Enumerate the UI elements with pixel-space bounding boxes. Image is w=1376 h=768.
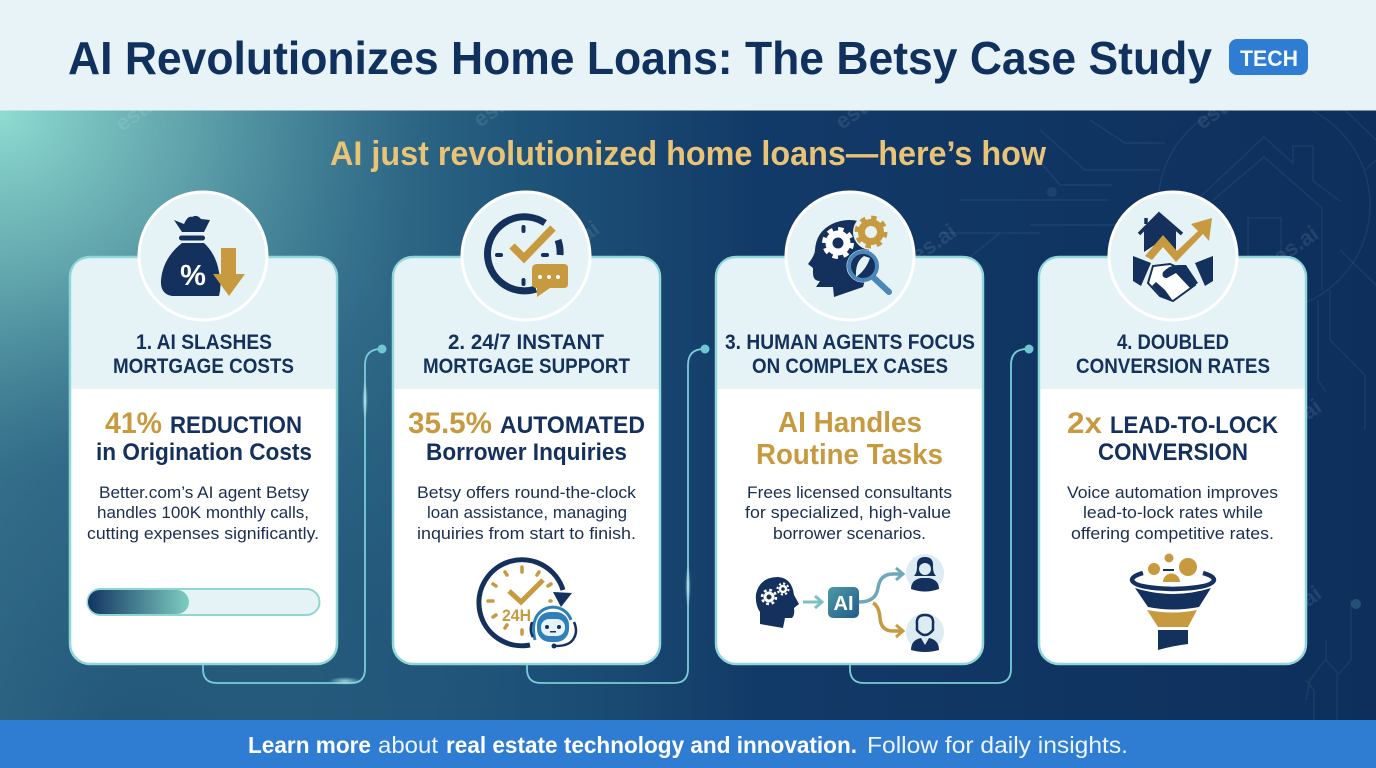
icon circle: head with gears and magnifier: [786, 192, 914, 320]
background: estates.ai: [864, 219, 961, 297]
heading: MORTGAGE SUPPORT: [423, 355, 630, 378]
body text: for specialized, high-value: [745, 503, 951, 522]
subtitle: AI just revolutionized home loans—here’s how: [330, 135, 1047, 173]
title: AI Revolutionizes Home Loans: The Betsy Case Study: [68, 32, 1212, 84]
icon: 24h clock with robot: 24H: [502, 606, 531, 625]
body text: offering competitive rates.: [1071, 524, 1274, 543]
stat: 35.5%: [408, 407, 492, 440]
stat: AI Handles: [778, 407, 922, 439]
footer text: Follow for daily insights.: [867, 732, 1128, 758]
icon circle: house, growth arrow and handshake: [1109, 192, 1237, 320]
body text: [87, 483, 319, 543]
icon circle: clock with check: [462, 192, 590, 320]
background: estates.ai: [1191, 56, 1287, 134]
footer text: about: [378, 732, 438, 758]
stat: CONVERSION: [1098, 439, 1248, 466]
heading: 4. DOUBLED: [1117, 331, 1229, 354]
stat: Borrower Inquiries: [426, 439, 627, 466]
body text: lead-to-lock rates while: [1083, 503, 1263, 522]
body text: handles 100K monthly calls,: [97, 503, 309, 522]
body text: loan assistance, managing: [427, 503, 627, 522]
panel: card 4: [1039, 192, 1306, 664]
body text: [417, 483, 637, 543]
heading: [113, 331, 294, 378]
connector: card 2 to card 3: [527, 344, 710, 683]
stat: 41%: [105, 407, 162, 440]
panel: card 3: [716, 192, 983, 664]
heading: 2. 24/7 INSTANT: [448, 331, 604, 354]
background: estates.ai: [469, 54, 565, 132]
background: estates.ai: [111, 58, 207, 136]
stat: REDUCTION: [170, 412, 302, 439]
diagram: human to AI to agents: [756, 554, 944, 652]
footer text: [248, 732, 1128, 758]
panel: card 1: [70, 192, 337, 664]
heading: CONVERSION RATES: [1076, 355, 1270, 378]
stat: [1067, 407, 1279, 466]
panel: card 2: [393, 192, 660, 664]
heading: ON COMPLEX CASES: [752, 355, 948, 378]
body text: Frees licensed consultants: [747, 483, 952, 502]
heading: MORTGAGE COSTS: [113, 355, 294, 378]
badge: TECH: TECH: [1240, 46, 1298, 71]
background: estates.ai: [1229, 581, 1326, 659]
stat: [408, 407, 645, 466]
diagram: human to AI to agents: AI: [834, 593, 854, 615]
footer text: real estate technology and innovation.: [446, 732, 857, 758]
icon: 24h clock with robot: [479, 560, 576, 648]
body text: Better.com’s AI agent Betsy: [99, 483, 310, 502]
header band: [0, 0, 1376, 110]
icon circle: money bag: %: [180, 260, 206, 292]
background: estates.ai: [507, 216, 604, 294]
body text: [1067, 483, 1278, 543]
heading: [423, 331, 630, 378]
stat: Routine Tasks: [756, 439, 943, 471]
body text: Betsy offers round-the-clock: [417, 483, 637, 502]
connector: card 1 to card 2: [203, 344, 386, 685]
background: estates.ai: [1229, 394, 1326, 472]
background: estates.ai: [831, 56, 927, 134]
progress bar: [88, 589, 320, 615]
footer band: [0, 720, 1376, 768]
body text: [745, 483, 952, 543]
body text: cutting expenses significantly.: [87, 524, 319, 543]
stat: LEAD-TO-LOCK: [1110, 412, 1279, 439]
stat: in Origination Costs: [96, 439, 312, 466]
heading: [725, 331, 975, 378]
background: estates.ai: [1226, 221, 1323, 299]
stat: AUTOMATED: [500, 412, 645, 439]
heading: 1. AI SLASHES: [136, 331, 272, 354]
connector: card 3 to card 4: [850, 344, 1034, 683]
icon circle: money bag: [139, 192, 267, 320]
footer text: Learn more: [248, 732, 371, 758]
body text: borrower scenarios.: [773, 524, 926, 543]
heading: [1076, 331, 1270, 378]
body text: inquiries from start to finish.: [417, 524, 636, 543]
stat: [96, 407, 312, 466]
stat: 2x: [1067, 407, 1102, 440]
badge: TECH: [1229, 39, 1308, 75]
icon: conversion funnel: [1132, 554, 1214, 650]
stat: [756, 407, 943, 471]
heading: 3. HUMAN AGENTS FOCUS: [725, 331, 975, 354]
body text: Voice automation improves: [1067, 483, 1278, 502]
